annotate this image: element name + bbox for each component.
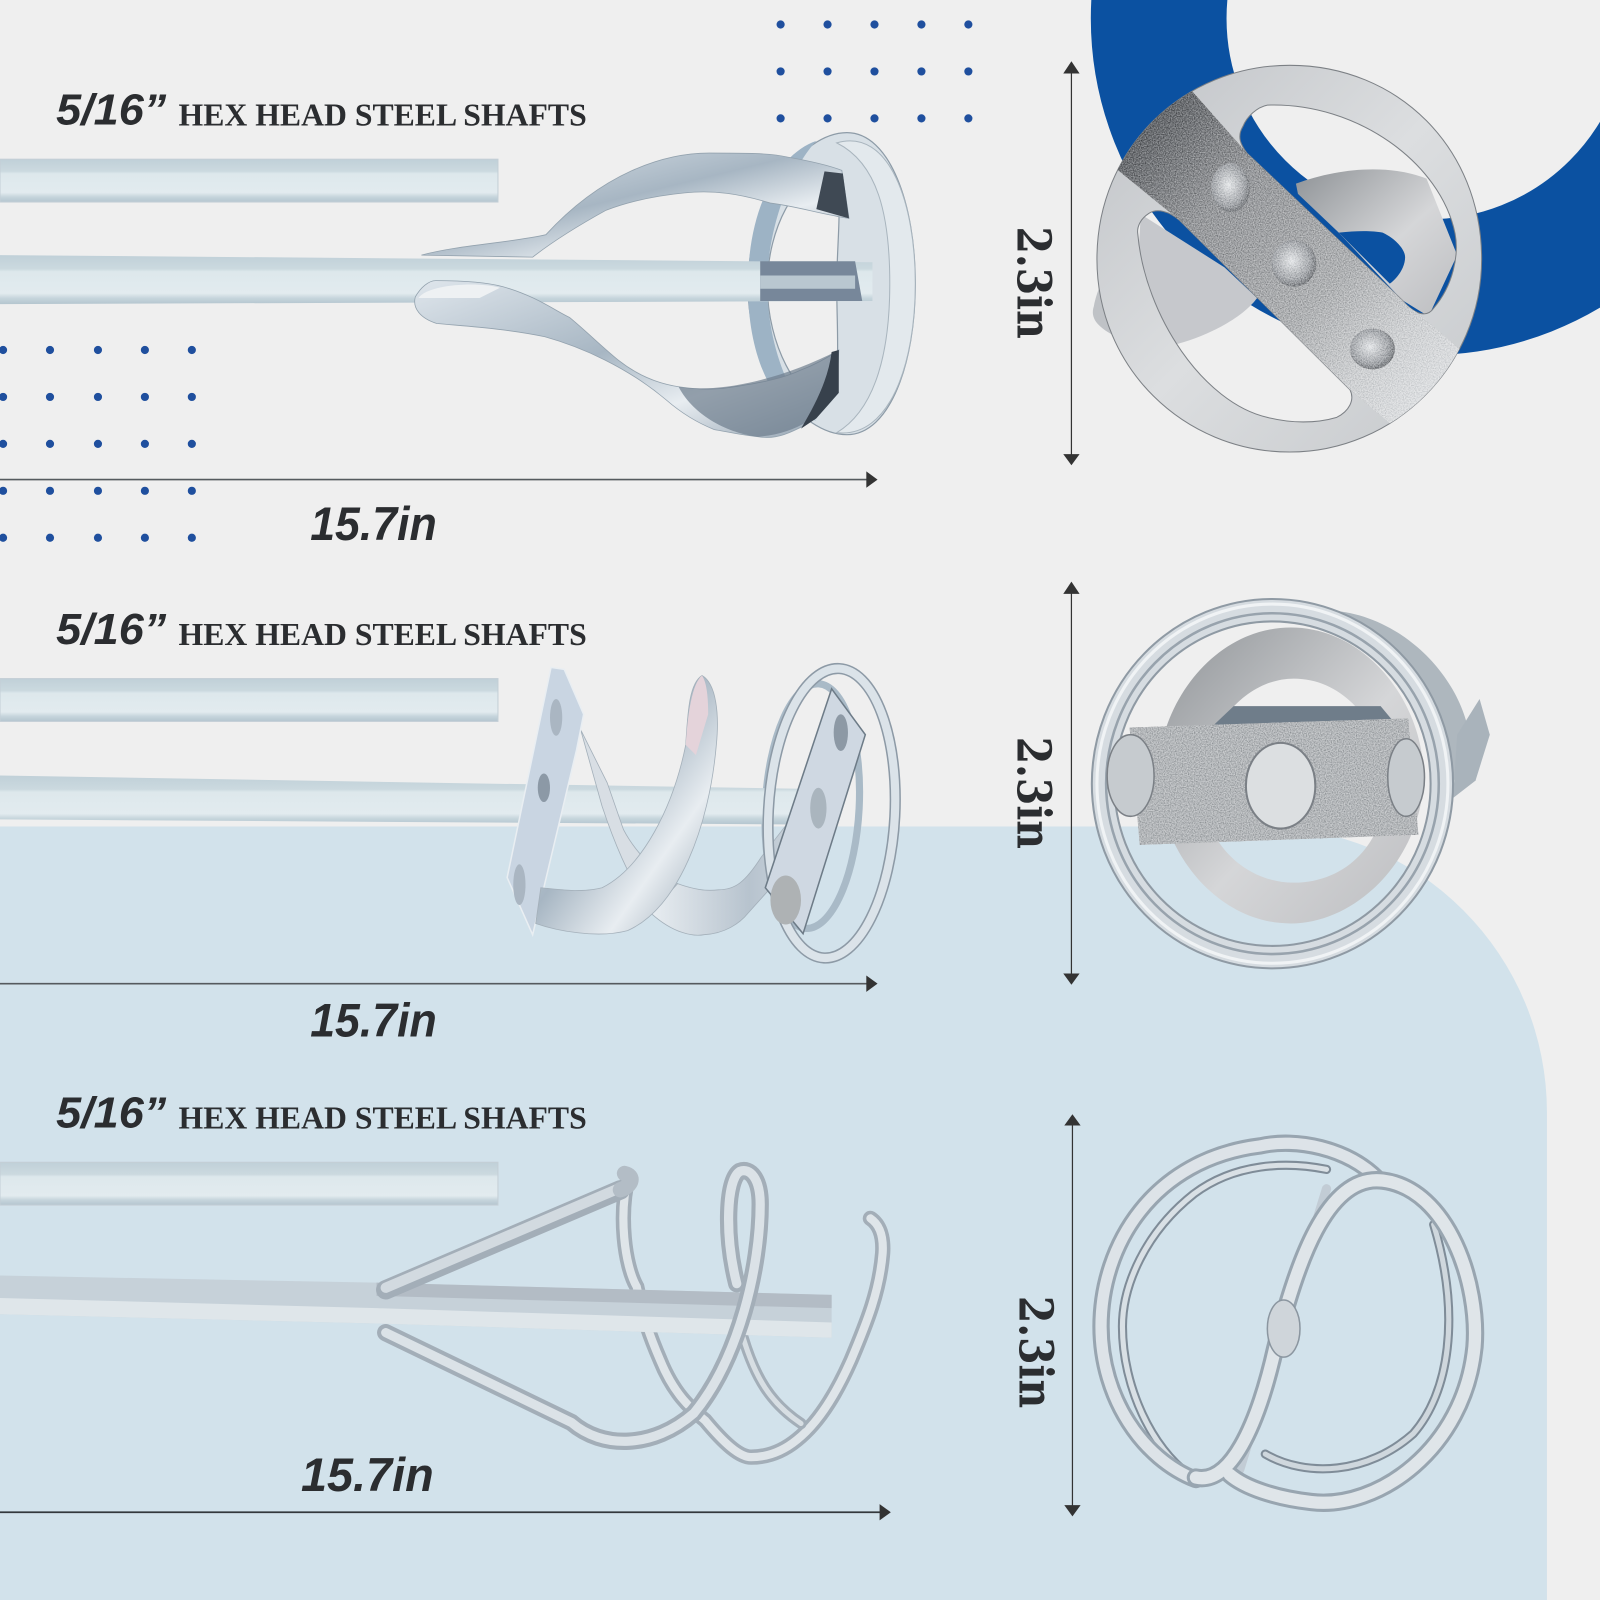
hex shaft end: row 1: [0, 159, 498, 202]
paddle 2 ring, rear: [759, 681, 866, 931]
paddle 2 right plate: [765, 689, 865, 934]
mixer paddle 1: side view: [0, 133, 915, 437]
hex shaft end: row 3: [0, 1162, 498, 1205]
label: 2.3in row 2: 2.3in: [1005, 737, 1060, 849]
decorative blue ring: [1159, 0, 1600, 287]
arrow: height row 2: [1063, 582, 1080, 985]
label: 2.3in row 1: 2.3in: [1005, 227, 1060, 339]
heading: row 1: [56, 85, 587, 134]
arrow: length row 1: [0, 471, 878, 488]
disc 3 front loop: [1196, 1180, 1475, 1503]
heading: row 2: 5/16”: [56, 605, 166, 654]
dot grid: left: [0, 346, 196, 542]
arrow: height row 1: [1063, 61, 1080, 465]
disc 3 outer tube: [1101, 1143, 1378, 1480]
label: 15.7in row 3: 15.7in: [301, 1449, 434, 1501]
disc 2 welds: [1246, 743, 1315, 829]
heading: row 3: HEX HEAD STEEL SHAFTS: [179, 1101, 587, 1136]
disc 2 outer ring: [1103, 610, 1442, 957]
paddle 3 shaft: [0, 1276, 832, 1338]
heading: row 3: [56, 1089, 587, 1138]
disc 1 welds: [1211, 163, 1250, 212]
disc 1 plate with two slots: [1097, 65, 1482, 452]
disc 1 rear blade: [1296, 169, 1457, 316]
disc 3 centre weld: [1267, 1300, 1300, 1357]
arrow: height row 3: [1064, 1114, 1081, 1516]
paddle 2 shaft: [0, 776, 801, 824]
mixer disc 2: end view: [1097, 604, 1490, 963]
arrow: length row 2: [0, 976, 878, 992]
paddle 3 lower wire and middle loop: [386, 1171, 760, 1441]
disc 2 tab: [1453, 699, 1490, 798]
paddle 2 back strand: [581, 730, 678, 913]
paddle 3 rear wire: [623, 1176, 883, 1457]
disc 3 bottom rear tubes: [1265, 1224, 1449, 1469]
dot grid: top right: [777, 20, 972, 122]
disc 2 rear rim: [1316, 610, 1469, 796]
heading: row 1: 5/16”: [56, 85, 166, 134]
heading: row 2: HEX HEAD STEEL SHAFTS: [179, 617, 587, 652]
paddle 1 lower blade: [415, 281, 839, 438]
disc 2 strap: [1130, 718, 1418, 845]
disc 1 strap: [1118, 92, 1460, 424]
heading: row 2: [56, 605, 587, 654]
mixer disc 3: end view: [1101, 1143, 1475, 1503]
heading: row 3: 5/16”: [56, 1089, 166, 1138]
paddle 2 front blade: [536, 676, 717, 934]
mixer paddle 3: side view: [0, 1171, 883, 1457]
heading: row 1: HEX HEAD STEEL SHAFTS: [179, 98, 587, 133]
paddle 2 ring: [761, 665, 902, 961]
disc 2 rear blade ring: [1158, 628, 1423, 923]
paddle 1 disc rim: [748, 133, 915, 435]
disc 3 inner rear bar: [1240, 1189, 1327, 1469]
paddle 2 left plate: [507, 667, 584, 935]
paddle 1 shaft: [0, 255, 872, 304]
arrow: length row 3: [0, 1504, 891, 1520]
hex shaft end: row 2: [0, 679, 498, 721]
paddle 1 upper blade: [421, 153, 849, 257]
paddle 2 second blade: [651, 714, 847, 935]
mixer disc 1: end view: [1093, 65, 1482, 452]
label: 15.7in row 2: 15.7in: [310, 995, 437, 1047]
paddle 3 upper arm: [386, 1173, 631, 1290]
disc 3 inner tube: [1122, 1165, 1327, 1474]
label: 15.7in row 1: 15.7in: [310, 498, 437, 550]
background panel: light blue: [0, 827, 1547, 1600]
label: 2.3in row 3: 2.3in: [1007, 1296, 1062, 1408]
mixer paddle 2: side view: [0, 665, 902, 961]
